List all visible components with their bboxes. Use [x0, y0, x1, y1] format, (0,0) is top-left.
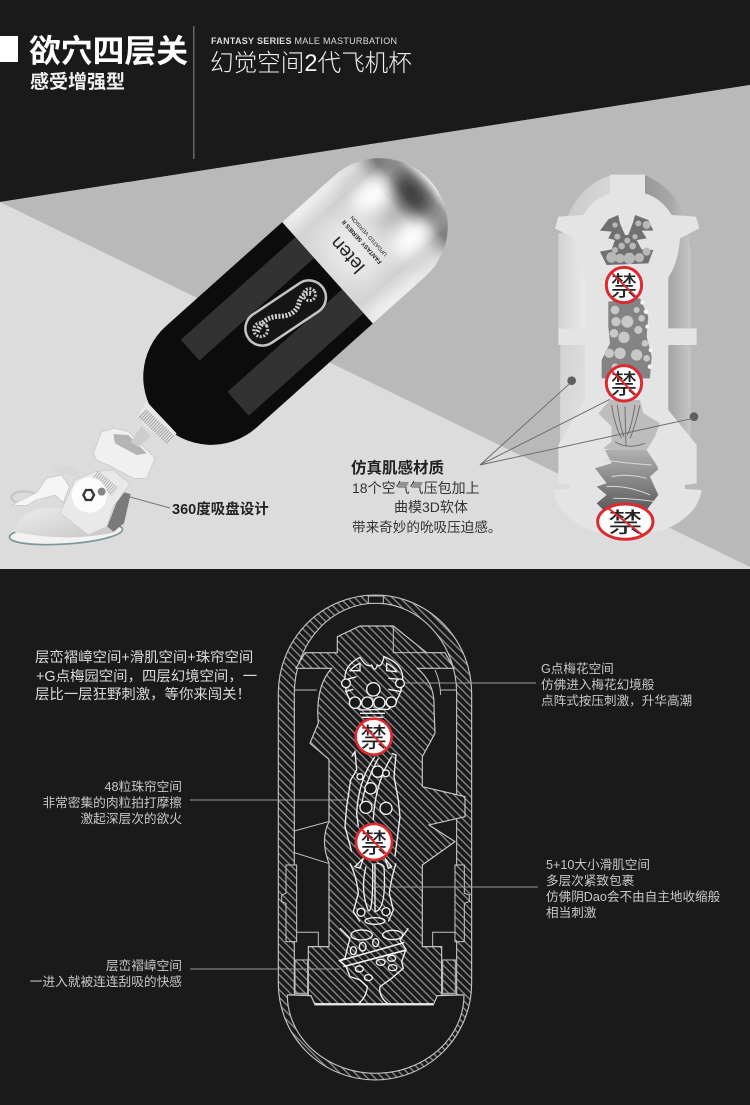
censor badge 3: 禁 — [608, 508, 643, 538]
diagram top vent — [368, 596, 383, 603]
diagram outer shell wall — [278, 595, 472, 1080]
capsule highlights — [282, 158, 448, 324]
sleeve spiral beads — [605, 306, 650, 370]
material text block — [351, 458, 502, 535]
material text block: 18个空气气压包加上 — [352, 480, 480, 496]
sleeve ribbons — [612, 405, 645, 447]
intro text: 层比一层狂野刺激，等你来闯关！ — [35, 683, 251, 704]
diagram flower chamber — [342, 657, 404, 717]
sleeve spiral white bumps — [640, 301, 653, 369]
diagram ribbed chamber — [350, 858, 396, 922]
title block — [0, 33, 188, 93]
censor badge 1 — [606, 267, 642, 303]
capsule brand text: leten — [326, 232, 370, 277]
sleeve left side panel — [558, 233, 588, 328]
cutaway sleeve — [480, 175, 702, 539]
callout: ribbed space: 相当刺激 — [546, 906, 597, 920]
mount arm — [60, 470, 130, 535]
callout: 48 bead space: 48粒珠帘空间 — [104, 779, 182, 794]
mount rear shadow — [107, 492, 131, 532]
material text block: 仿真肌感材质 — [351, 458, 444, 477]
callout: ribbed space: 仿佛阴Dao会不由自主地收缩般 — [546, 889, 721, 904]
subtitle block: FANTASY SERIES MALE MASTURBATION — [211, 36, 397, 46]
callout: ribbed space — [546, 858, 721, 920]
sleeve screw ridges — [605, 460, 655, 502]
callout: ribbed space: 5+10大小滑肌空间 — [546, 858, 650, 872]
subtitle block — [210, 36, 412, 77]
capsule black body — [115, 222, 373, 473]
callout: flower space: 点阵式按压刺激，升华高潮 — [541, 690, 692, 709]
material text block: 曲模3D软体 — [394, 499, 468, 515]
intro text — [35, 649, 257, 704]
product: capsule — [143, 158, 448, 445]
capsule brand text: FANTASY SERIES II — [341, 218, 384, 264]
mount base — [9, 519, 123, 548]
panel: product showcase background — [0, 85, 750, 569]
mount leader line — [130, 497, 170, 508]
sleeve pointer dots — [567, 376, 698, 421]
callout: 48 bead space — [42, 779, 182, 826]
censor badge 2 — [606, 366, 642, 401]
capsule brand text — [321, 212, 390, 282]
mount hex nut — [93, 428, 155, 478]
title block: 感受增强型 — [30, 70, 125, 93]
mount neck — [131, 426, 151, 447]
sleeve screw cavity — [595, 450, 658, 510]
mount lever fold — [52, 466, 80, 477]
diagram side latches — [282, 865, 469, 993]
capsule brand text: UPDATED VERSION — [350, 214, 389, 257]
product: suction mount — [9, 402, 177, 548]
header divider — [193, 26, 194, 159]
mount lever — [12, 475, 69, 506]
diagram interior lines — [294, 626, 457, 947]
censor badge 2: 禁 — [611, 370, 637, 400]
mount knurled collar — [140, 402, 177, 443]
diagram censor badge 1: 禁 — [360, 723, 387, 753]
mount knurl — [95, 475, 115, 492]
diagram bead chamber — [345, 752, 400, 857]
callout: 48 bead space: 激起深层次的欲火 — [80, 811, 182, 826]
intro text: 层峦褶嶂空间+滑肌空间+珠帘空间 — [35, 649, 253, 666]
callout: 48 bead space: 非常密集的肉粒拍打摩擦 — [42, 795, 182, 810]
callout: ribbed space: 多层次紧致包裹 — [546, 874, 635, 888]
sleeve spiral cavity — [602, 298, 653, 378]
leader lines for diagram — [190, 683, 538, 969]
diagram censor badge 2: 禁 — [361, 828, 387, 858]
censor badge 3 — [598, 504, 653, 539]
capsule window — [239, 274, 333, 352]
callout: entry space: 一进入就被连连刮吸的快感 — [30, 974, 182, 989]
mount dome — [13, 508, 118, 537]
capsule grey bands — [181, 237, 364, 416]
sleeve flower beads — [606, 220, 651, 264]
diagram inner sleeve — [288, 626, 465, 1005]
panel: structure diagram — [278, 595, 472, 1080]
sleeve pointer lines — [480, 383, 693, 465]
sleeve back shell right — [627, 175, 691, 457]
diagram censor badge 2 — [356, 824, 392, 860]
capsule silver cap — [282, 130, 476, 324]
intro text: +G点梅园空间，四层幻境空间，一 — [36, 665, 257, 686]
subtitle block: 幻觉空间2代飞机杯 — [210, 50, 412, 77]
callout: flower space: 仿佛进入梅花幻境般 — [541, 677, 655, 692]
material text block: 带来奇妙的吮吸压迫感。 — [352, 519, 502, 535]
mount nut opening — [113, 434, 147, 455]
sleeve flower cavity — [600, 215, 653, 265]
sleeve ridged cavity — [595, 400, 660, 510]
diagram censor badge 1 — [356, 719, 392, 755]
sleeve back shell left — [560, 175, 627, 467]
callout: flower space — [541, 661, 692, 709]
mount label: 360度吸盘设计 — [172, 500, 269, 518]
callout: entry space — [30, 958, 182, 989]
mount lever ring — [11, 491, 37, 503]
title block: 欲穴四层关 — [29, 33, 188, 69]
sleeve front body — [553, 175, 702, 532]
callout: entry space: 层峦褶嶂空间 — [106, 958, 182, 973]
mount knob — [72, 477, 107, 513]
censor badge 1: 禁 — [611, 271, 637, 301]
callout: flower space: G点梅花空间 — [541, 661, 614, 676]
diagram entry chamber — [315, 918, 433, 1004]
